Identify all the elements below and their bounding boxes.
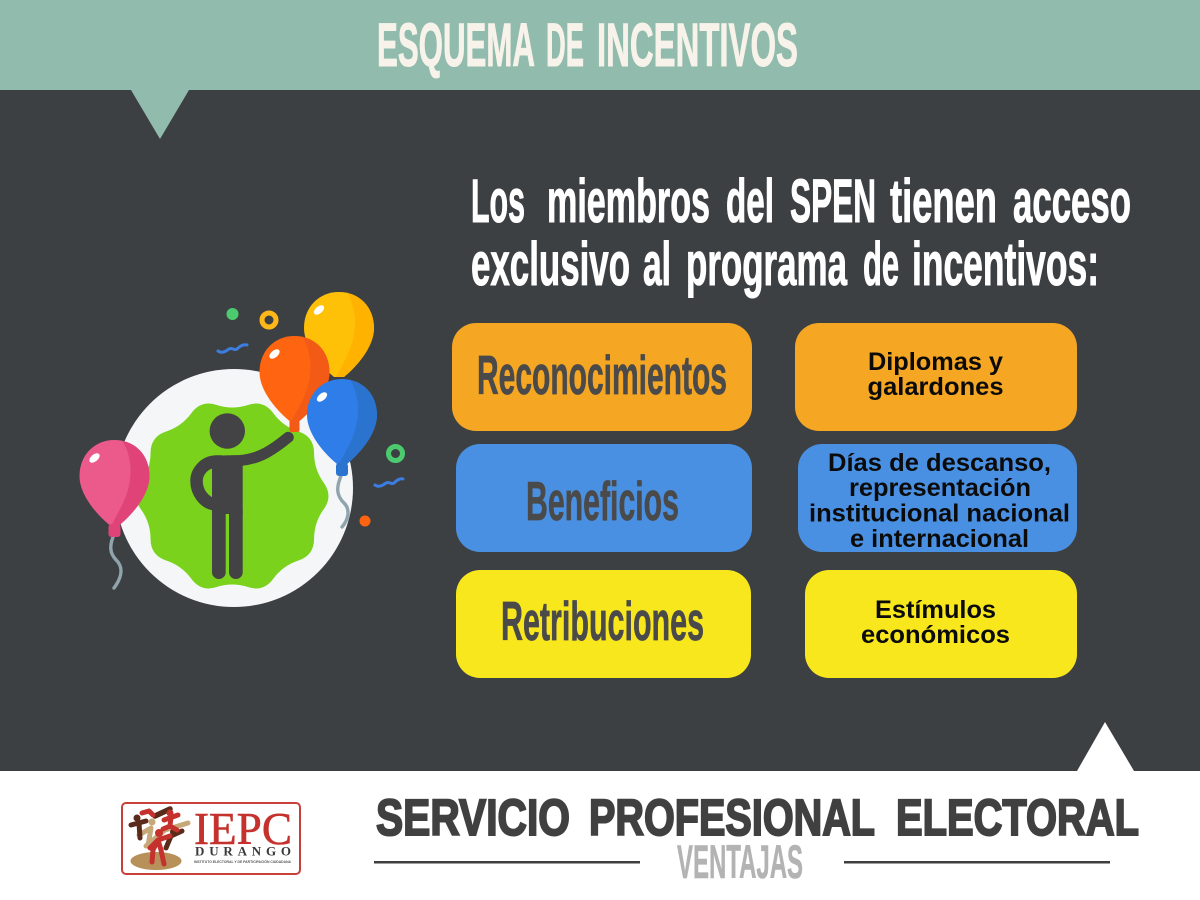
green badge bbox=[136, 404, 328, 588]
blue balloon bbox=[307, 379, 377, 476]
heading bbox=[471, 167, 1131, 298]
box: diplomas: Diplomas y bbox=[868, 348, 1003, 376]
blue balloon string bbox=[338, 476, 348, 527]
title: DE bbox=[546, 11, 584, 79]
row: retribuciones bbox=[456, 570, 1077, 678]
heading: de bbox=[863, 230, 899, 298]
header band bbox=[0, 0, 1200, 139]
orange balloon bbox=[260, 336, 330, 432]
box: dias de descanso: institucional nacional bbox=[809, 500, 1070, 528]
heading: SPEN bbox=[790, 167, 876, 235]
footer band bbox=[0, 722, 1200, 900]
box: estimulos: económicos bbox=[861, 621, 1010, 649]
box: diplomas bbox=[795, 323, 1077, 431]
illustration: person with balloons bbox=[80, 292, 403, 607]
white circle bbox=[115, 369, 353, 607]
logo wordmark: IEPC bbox=[194, 803, 292, 854]
logo small print: INSTITUTO ELECTORAL Y DE PARTICIPACIÓN CIUDADANA bbox=[194, 859, 291, 864]
box: retribuciones: Retribuciones bbox=[501, 590, 704, 652]
box: dias de descanso bbox=[798, 444, 1077, 553]
logo emblem bbox=[130, 809, 188, 870]
box: beneficios bbox=[456, 444, 752, 552]
box: estimulos bbox=[805, 570, 1077, 678]
footer title bbox=[376, 789, 1139, 846]
title: ESQUEMA bbox=[377, 11, 535, 79]
person figure bbox=[196, 413, 288, 579]
box: reconocimientos bbox=[452, 323, 752, 431]
row: reconocimientos bbox=[452, 323, 1077, 431]
heading: miembros bbox=[547, 167, 710, 235]
box: dias de descanso: e internacional bbox=[850, 525, 1029, 553]
box: beneficios: Beneficios bbox=[526, 470, 679, 532]
box: reconocimientos: Reconocimientos bbox=[477, 344, 727, 406]
box: diplomas: galardones bbox=[868, 373, 1004, 401]
box: dias de descanso: representación bbox=[849, 474, 1031, 502]
confetti bbox=[218, 308, 403, 526]
heading: tienen bbox=[890, 167, 997, 235]
box: dias de descanso: Días de descanso, bbox=[828, 449, 1051, 477]
heading: exclusivo bbox=[471, 230, 630, 298]
logo IEPC Durango bbox=[122, 803, 300, 874]
heading: del bbox=[726, 167, 774, 235]
heading: al bbox=[643, 230, 671, 298]
box: estimulos: Estímulos bbox=[875, 596, 996, 624]
title: INCENTIVOS bbox=[597, 11, 798, 79]
pink balloon bbox=[80, 440, 150, 537]
footer title: SERVICIO bbox=[376, 789, 570, 846]
pink balloon string bbox=[111, 537, 121, 588]
logo subtitle: DURANGO bbox=[195, 844, 291, 858]
box: retribuciones bbox=[456, 570, 751, 678]
heading: Los bbox=[471, 167, 525, 235]
footer title: ELECTORAL bbox=[896, 789, 1139, 846]
row: beneficios bbox=[456, 444, 1077, 553]
footer subtitle: VENTAJAS bbox=[677, 835, 803, 888]
footer title: PROFESIONAL bbox=[589, 789, 875, 846]
heading: programa bbox=[686, 230, 848, 298]
yellow balloon bbox=[304, 292, 374, 377]
